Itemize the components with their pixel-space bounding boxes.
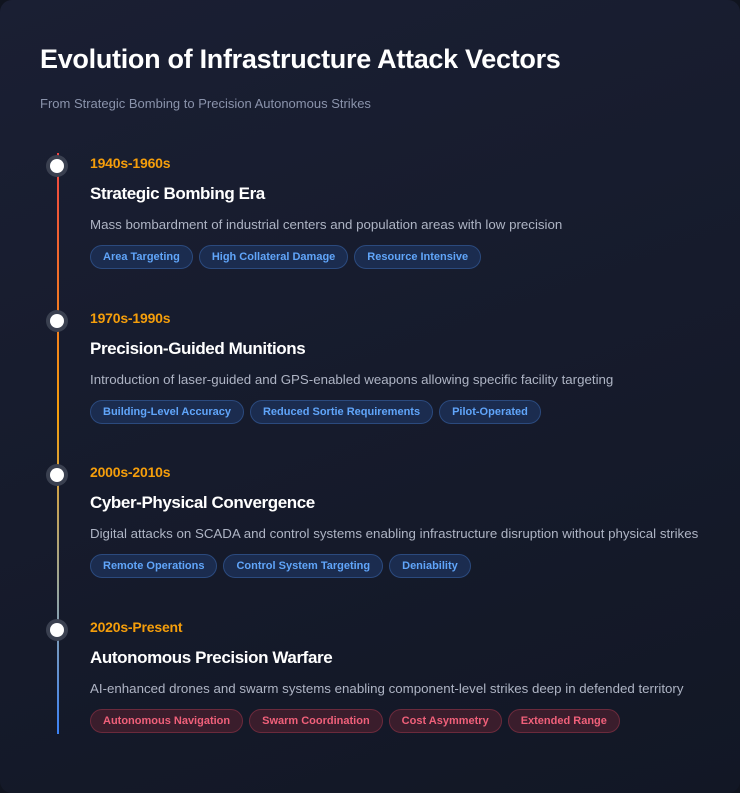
timeline item: 1970s: Precision-Guided Munitions	[90, 339, 305, 358]
timeline item: 2020s: Extended Range	[521, 715, 607, 727]
timeline item: 2000s: Deniability	[402, 560, 458, 572]
subtitle: From Strategic Bombing to Precision Autonomous Strikes	[40, 96, 371, 111]
timeline item: 2020s: 2020s-Present	[90, 619, 182, 635]
timeline item: 1970s: Introduction of laser-guided and GPS-enabled weapons allowing specific facility targeting	[90, 372, 613, 387]
timeline item: 2000s: Remote Operations	[103, 560, 204, 572]
timeline item: 1970s	[46, 310, 613, 424]
timeline item: 2020s: Autonomous Navigation	[103, 715, 230, 727]
timeline item: 1970s: Pilot-Operated	[452, 406, 528, 418]
timeline item: 1940s: High Collateral Damage	[212, 251, 335, 263]
timeline item: 2020s: Swarm Coordination	[262, 715, 370, 727]
timeline item: 1970s: Reduced Sortie Requirements	[263, 406, 420, 418]
timeline item: 2020s: Cost Asymmetry	[402, 715, 489, 727]
timeline item: 2000s: Control System Targeting	[236, 560, 370, 572]
timeline item: 1940s	[46, 155, 562, 269]
timeline item: 2000s: 2000s-2010s	[90, 464, 170, 480]
title: Evolution of Infrastructure Attack Vectors	[40, 44, 561, 74]
timeline item: 1940s: Area Targeting	[103, 251, 180, 263]
timeline item: 1940s: Mass bombardment of industrial centers and population areas with low precision	[90, 217, 562, 232]
timeline item: 2000s	[46, 464, 698, 578]
timeline item: 1940s: Strategic Bombing Era	[90, 184, 265, 203]
timeline item: 1940s: 1940s-1960s	[90, 155, 170, 171]
timeline item: 2000s: Digital attacks on SCADA and control systems enabling infrastructure disruption without physical strikes	[90, 526, 698, 541]
timeline item: 1970s: 1970s-1990s	[90, 310, 170, 326]
timeline line	[57, 153, 59, 734]
timeline item: 2020s: Autonomous Precision Warfare	[90, 648, 332, 667]
timeline item: 1970s: Building-Level Accuracy	[103, 406, 231, 418]
timeline item: 1940s: Resource Intensive	[367, 251, 468, 263]
timeline item: 2000s: Cyber-Physical Convergence	[90, 493, 315, 512]
timeline item: 2020s	[46, 619, 684, 733]
timeline item: 2020s: AI-enhanced drones and swarm systems enabling component-level strikes deep in defended territory	[90, 681, 684, 696]
